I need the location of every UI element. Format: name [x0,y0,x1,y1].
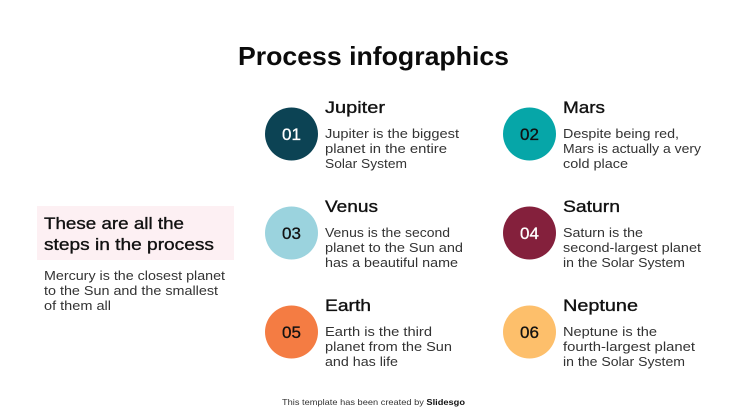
description: Venus: Venus is the second [325,225,450,240]
step 01: Jupiter [265,98,459,171]
step 02: Mars [503,98,702,171]
heading: Earth: Earth [325,296,371,315]
description: Jupiter: planet in the entire [325,141,447,156]
summary heading: steps in the process [44,235,214,254]
summary body text: Mercury is the closest planet [44,268,225,283]
description: Mars [563,126,702,171]
description: Saturn: second-largest planet [563,240,701,255]
footer credit: This template has been created by Slidesgo [282,397,465,407]
heading: Mars: Mars [563,98,605,117]
number badge 05 [265,306,318,358]
number badge 04 [503,206,556,260]
heading: Neptune: Neptune [563,296,638,315]
step 04: Saturn [503,197,701,270]
description: Saturn: in the Solar System [563,255,685,270]
summary body text: of them all [44,298,111,313]
heading: Saturn: Saturn [563,197,620,216]
description: Earth: planet from the Sun [325,339,452,354]
title: Process infographics [238,41,509,71]
heading: Jupiter: Jupiter [325,98,385,117]
description: Neptune: Neptune is the [563,324,657,339]
description: Earth: Earth is the third [325,324,432,339]
description: Neptune [563,324,695,369]
number badge 02: 02 [520,125,539,144]
number badge 04: 04 [520,224,539,243]
description: Venus: planet to the Sun and [325,240,463,255]
number badge 02 [503,108,556,160]
description: Earth [325,324,452,369]
number badge 01: 01 [282,125,301,144]
heading: Venus: Venus [325,197,378,216]
summary heading: These are all the [44,214,184,233]
number badge 05: 05 [282,323,301,342]
summary heading [44,214,214,254]
description: Mars: Mars is actually a very [563,141,702,156]
number badge 03: 03 [282,224,301,243]
panel: summary [37,206,234,313]
description: Earth: and has life [325,354,398,369]
description: Venus: has a beautiful name [325,255,458,270]
description: Mars: Despite being red, [563,126,679,141]
description: Jupiter: Solar System [325,156,407,171]
summary body text [44,268,225,313]
step 05: Earth [265,296,452,369]
number badge 06 [503,306,556,358]
description: Jupiter [325,126,459,171]
description: Saturn [563,225,701,270]
step 06: Neptune [503,296,695,369]
number badge 03 [265,206,318,260]
description: Jupiter: Jupiter is the biggest [325,126,459,141]
summary body text: to the Sun and the smallest [44,283,218,298]
description: Neptune: in the Solar System [563,354,685,369]
description: Venus [325,225,463,270]
description: Saturn: Saturn is the [563,225,643,240]
step 03: Venus [265,197,463,270]
description: Mars: cold place [563,156,628,171]
number badge 01 [265,108,318,160]
number badge 06: 06 [520,323,539,342]
summary highlight box [37,206,234,260]
description: Neptune: fourth-largest planet [563,339,695,354]
